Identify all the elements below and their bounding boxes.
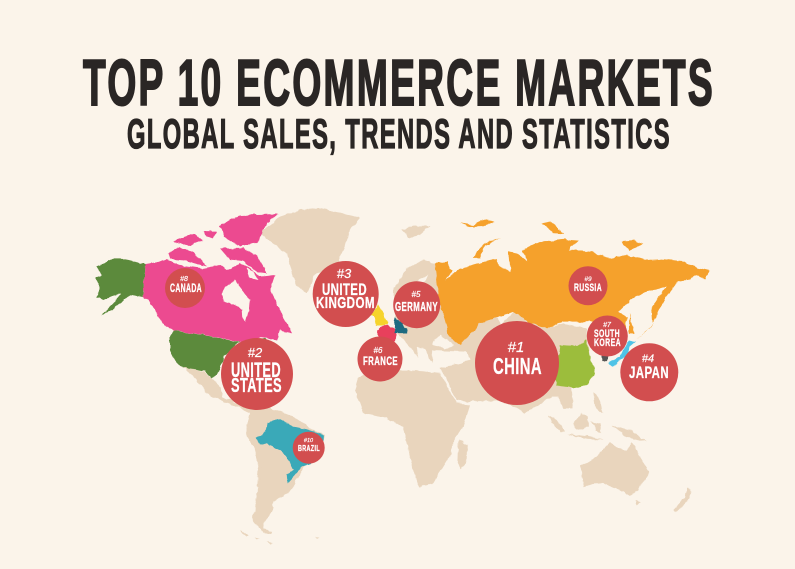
marker: russia: RUSSIA: [574, 282, 602, 294]
country: united states: [95, 259, 266, 378]
country: canada: [143, 214, 292, 343]
marker: united states: STATES: [231, 375, 282, 397]
marker: united states: [221, 338, 293, 410]
country: france: [376, 324, 397, 344]
marker: france: [358, 336, 402, 382]
marker: united states: UNITED: [231, 359, 281, 382]
marker: germany: [393, 281, 440, 328]
marker: united kingdom: KINGDOM: [316, 295, 375, 312]
country: south korea: [602, 355, 608, 362]
country: china: [555, 340, 595, 388]
country: united kingdom: [371, 304, 387, 326]
inland seas: [415, 274, 482, 384]
marker: japan: JAPAN: [629, 363, 669, 382]
marker: united states: #2: [248, 345, 263, 360]
marker: china: CHINA: [493, 353, 542, 379]
marker: united kingdom: #3: [337, 266, 352, 281]
marker: germany: #5: [412, 290, 421, 299]
marker: brazil: [293, 432, 325, 464]
marker: united kingdom: UNITED: [322, 280, 367, 299]
marker: japan: #4: [642, 353, 654, 365]
world map: [95, 208, 711, 544]
marker: canada: CANADA: [170, 281, 202, 295]
landmass: south america tip: [241, 460, 320, 544]
marker: japan: [620, 343, 678, 401]
marker: united kingdom: [313, 261, 379, 327]
landmass: asia and oceania: [463, 312, 692, 512]
country: germany: [394, 317, 407, 333]
country: brazil: [257, 418, 324, 484]
marker: south korea: [587, 316, 628, 356]
marker: south korea: #7: [603, 322, 612, 329]
marker: canada: #8: [180, 276, 188, 283]
marker: brazil: #10: [304, 438, 314, 444]
marker: france: #6: [374, 346, 383, 355]
landmass: africa and europe: [355, 226, 513, 487]
marker: china: [475, 321, 559, 405]
country: russia: [435, 219, 711, 345]
marker: south korea: KOREA: [594, 337, 621, 349]
marker: germany: GERMANY: [395, 299, 438, 314]
marker: south korea: SOUTH: [594, 328, 620, 340]
country: japan: [608, 340, 636, 367]
landmass: americas and greenland: [183, 208, 360, 497]
marker: canada: [165, 268, 205, 308]
marker: russia: #9: [584, 276, 592, 283]
marker: china: #1: [508, 339, 524, 356]
marker: brazil: BRAZIL: [298, 443, 320, 453]
marker: france: FRANCE: [363, 354, 398, 368]
marker: russia: [568, 266, 608, 305]
